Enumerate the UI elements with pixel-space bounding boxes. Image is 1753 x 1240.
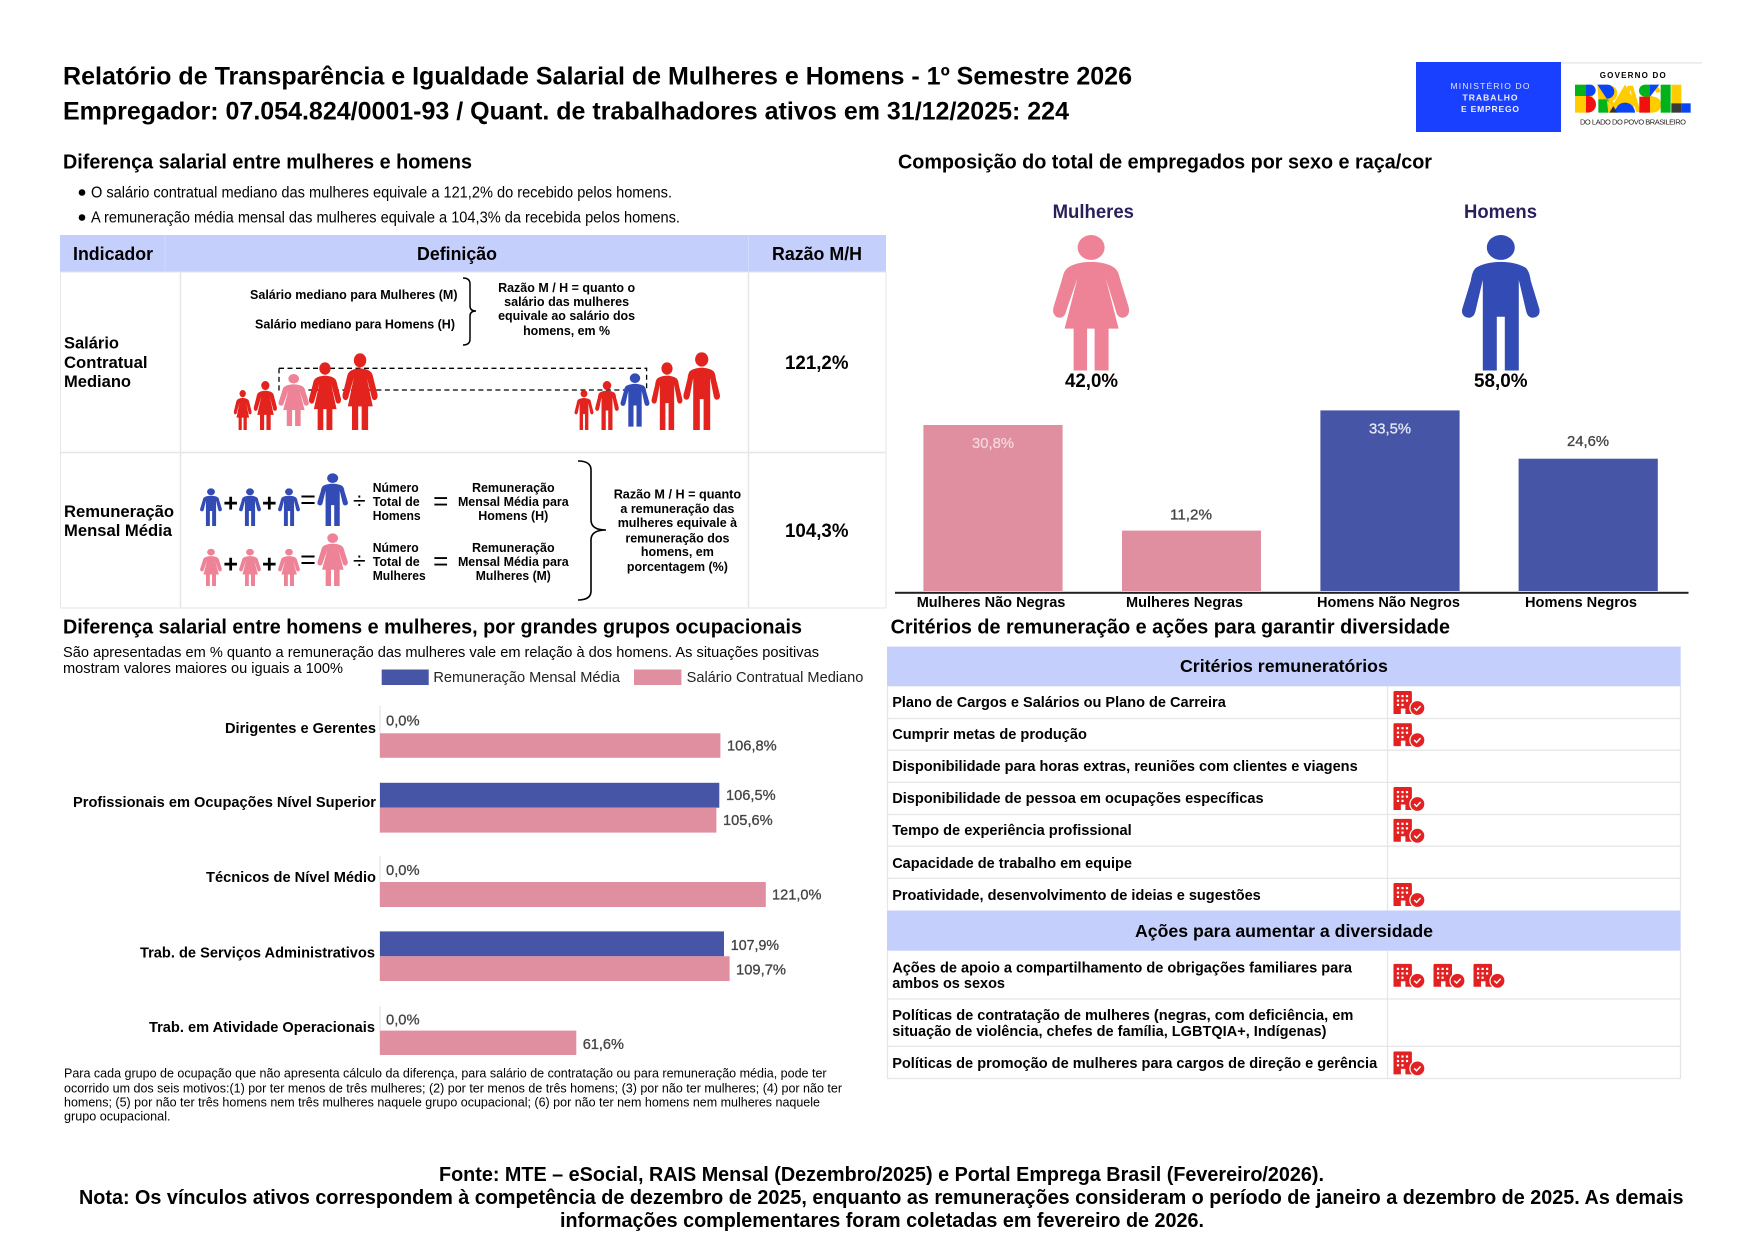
panel: criteria table: Proatividade, desenvolvimento de ideias e sugestões [892,888,1261,904]
definition: ratio explanation with brace [578,461,741,600]
panel: salary indicator table: Mensal Média [64,521,173,540]
definition: average pay formula for men: Homens (H) [478,508,548,523]
panel: salary indicator table: Salário [64,334,119,352]
group: Profissionais em Ocupações Nível Superior: 106,5% [726,787,776,804]
definition: average pay formula for men: Número [373,480,419,495]
definition: average pay formula for men: Homens [373,508,421,523]
panel: criteria table: Ações para aumentar a diversidade [1135,921,1433,941]
chart legend [382,669,863,686]
definition: median salary: homens, em % [523,323,611,338]
bar chart: composition by sex and race: Homens Negros [1525,595,1637,611]
panel: criteria table: situação de violência, chefes de família, LGBTQIA+, Indígenas) [892,1024,1327,1040]
group: Trab. em Atividade Operacionais: 61,6% [583,1036,624,1053]
definition: ratio explanation with brace: homens, em [641,544,714,559]
icons: women and men ordered by salary [234,352,720,430]
definition: average pay formula for men: + [262,490,277,518]
group: Técnicos de Nível Médio: Técnicos de Nível Médio [206,870,376,886]
definition: average pay formula for men: ÷ [353,488,366,514]
group: Técnicos de Nível Médio: 121,0% [772,886,822,904]
definition: median salary: Salário mediano para Homens (H) [255,316,455,332]
footer: source and note [79,1164,1684,1232]
bar chart: composition by sex and race: Homens Não Negros [1317,595,1460,611]
panel: criteria table: Disponibilidade para horas extras, reuniões com clientes e viagens [892,759,1358,775]
panel: criteria table: Capacidade de trabalho em equipe [892,856,1132,872]
panel: criteria table [887,647,1681,1078]
definition: ratio explanation with brace: remuneração dos [625,530,729,545]
women total figure: Mulheres [1053,202,1134,223]
panel: salary indicator table: Contratual [64,353,148,372]
panel: criteria table: Cumprir metas de produção [892,727,1087,743]
definition: median salary [250,278,635,345]
heading: grupos ocupacionais: Diferença salarial entre homens e mulheres, por grandes grupos ocupacionais [63,616,802,638]
group: Técnicos de Nível Médio [206,862,822,907]
group: Dirigentes e Gerentes: 106,8% [727,738,777,754]
logo: Ministério do Trabalho e Emprego / Governo do Brasil: GOVERNO DO [1600,71,1666,80]
group: Trab. de Serviços Administrativos [140,931,786,981]
chart legend: Salário Contratual Mediano [687,669,863,686]
logo: Ministério do Trabalho e Emprego / Governo do Brasil: MINISTÉRIO DO [1450,81,1530,91]
chart description: mostram valores maiores ou iguais a 100% [63,660,343,677]
logo: Ministério do Trabalho e Emprego / Governo do Brasil: DO LADO DO POVO BRASILEIRO [1580,118,1686,126]
panel: salary indicator table [60,235,886,608]
title: Empregador: 07.054.824/0001-93 / Quant. de trabalhadores ativos em 31/12/2025: 224 [63,98,1069,126]
panel: criteria table: ambos os sexos [892,976,1005,992]
summary bullets: A remuneração média mensal das mulheres equivale a 104,3% da recebida pelos homens. [91,210,680,226]
logo: Ministério do Trabalho e Emprego / Governo do Brasil: BRASIL [1574,79,1690,121]
panel: salary indicator table: Definição [417,244,497,264]
group: Trab. de Serviços Administrativos: Trab. de Serviços Administrativos [140,946,375,962]
bar chart: composition by sex and race: 11,2% [1170,506,1212,524]
chart description: São apresentadas em % quanto a remuneração das mulheres vale em relação à dos homens. As situações positivas [63,644,819,661]
logo: Ministério do Trabalho e Emprego / Governo do Brasil [1416,62,1702,132]
footer: source and note: informações complementares foram coletadas em fevereiro de 2026. [560,1210,1204,1232]
panel: criteria table: Plano de Cargos e Salários ou Plano de Carreira [892,695,1227,711]
definition: average pay formula for women: Total de [373,554,420,569]
bar chart: composition by sex and race: Mulheres Não Negras [917,595,1065,611]
group: Dirigentes e Gerentes: Dirigentes e Gerentes [225,721,376,737]
men total figure [1462,202,1540,392]
logo: Ministério do Trabalho e Emprego / Governo do Brasil: TRABALHO [1462,92,1518,102]
definition: average pay formula for men: = [300,484,316,514]
men total figure: Homens [1464,202,1537,223]
logo: Ministério do Trabalho e Emprego / Governo do Brasil: E EMPREGO [1461,104,1519,114]
bar chart: composition by sex and race: Mulheres Negras [1126,595,1243,611]
definition: median salary: Salário mediano para Mulheres (M) [250,287,458,302]
definition: average pay formula for women: Mensal Média para [458,554,570,569]
panel: salary indicator table: Razão M/H [772,244,862,264]
bar chart: occupational groups [73,706,822,1055]
panel: criteria table: Ações de apoio a compartilhamento de obrigações familiares para [892,960,1353,976]
panel: criteria table: Políticas de contratação de mulheres (negras, com deficiência, em [892,1008,1353,1024]
definition: ratio explanation with brace: mulheres equivale à [618,515,738,530]
women total figure [1053,202,1134,392]
bar chart: composition by sex and race: 33,5% [1369,420,1411,438]
group: Trab. em Atividade Operacionais: 0,0% [386,1012,420,1028]
definition: average pay formula for women [200,533,570,586]
men total figure: 58,0% [1474,371,1528,392]
footnote: grupo ocupacional. [64,1108,170,1123]
definition: median salary: Razão M / H = quanto o [498,280,635,295]
definition: ratio explanation with brace: a remuneração das [620,501,734,516]
footnote [64,1066,843,1123]
chart description [63,644,819,677]
definition: average pay formula for women: Remuneração [472,540,555,555]
bar chart: composition by sex and race: 30,8% [972,435,1014,452]
panel: criteria table: Tempo de experiência profissional [892,823,1132,839]
heading: critérios: Critérios de remuneração e ações para garantir diversidade [891,616,1450,638]
title: Relatório de Transparência e Igualdade Salarial de Mulheres e Homens - 1º Semestre 2026 [63,62,1132,90]
definition: ratio explanation with brace: porcentagem (%) [627,559,728,574]
group: Profissionais em Ocupações Nível Superior [73,783,776,833]
group: Técnicos de Nível Médio: 0,0% [386,862,420,879]
panel: salary indicator table: Remuneração [64,502,174,521]
summary bullets: O salário contratual mediano das mulheres equivale a 121,2% do recebido pelos homens. [91,184,672,202]
group: Dirigentes e Gerentes [225,712,777,758]
definition: average pay formula for women: + [262,550,277,578]
panel: criteria table: Critérios remuneratórios [1180,656,1388,676]
heading: composição: Composição do total de empregados por sexo e raça/cor [898,152,1432,174]
group: Trab. em Atividade Operacionais: Trab. em Atividade Operacionais [149,1020,375,1036]
definition: average pay formula for women: = [433,546,448,576]
group: Profissionais em Ocupações Nível Superior: 105,6% [723,812,773,829]
bar chart: composition by sex and race: 24,6% [1567,433,1609,450]
group: Trab. de Serviços Administrativos: 109,7% [736,962,786,978]
group: Dirigentes e Gerentes: 0,0% [386,712,420,730]
panel: criteria table: Disponibilidade de pessoa em ocupações específicas [892,791,1264,807]
definition: average pay formula for women: Mulheres [373,568,426,583]
footer: source and note: Nota: Os vínculos ativos correspondem à competência de dezembro de 2025, enquanto as remunerações consideram o período de janeiro a dezembro de 2025. As demais [79,1187,1684,1209]
definition: average pay formula for men: + [223,490,238,518]
panel: salary indicator table: Mediano [64,372,131,391]
bar chart: composition by sex and race [895,410,1688,611]
definition: average pay formula for women: ÷ [353,548,366,574]
definition: average pay formula for men: Remuneração [472,480,555,495]
definition: average pay formula for men: Total de [373,494,420,509]
definition: ratio explanation with brace: Razão M / H = quanto [614,487,741,502]
definition: median salary: salário das mulheres [504,294,629,309]
footer: source and note: Fonte: MTE – eSocial, RAIS Mensal (Dezembro/2025) e Portal Emprega Brasil (Fevereiro/2026). [439,1164,1324,1186]
definition: average pay formula for women: = [300,544,316,574]
definition: average pay formula for women: Mulheres (M) [476,568,551,583]
women total figure: 42,0% [1065,371,1118,392]
panel: salary indicator table: Indicador [73,244,153,264]
group: Trab. em Atividade Operacionais [149,1012,624,1055]
definition: average pay formula for men: Mensal Média para [458,494,570,509]
footnote: homens; (5) por não ter três homens nem três mulheres naquele grupo ocupacional; (6) por não ter nem homens nem mulheres naquele [64,1094,820,1109]
heading: diferença salarial: Diferença salarial entre mulheres e homens [63,152,472,174]
footnote: Para cada grupo de ocupação que não apresenta cálculo da diferença, para salário de contratação ou para remuneração média, pode ter [64,1066,827,1080]
panel: criteria table: Políticas de promoção de mulheres para cargos de direção e gerência [892,1056,1378,1072]
group: Trab. de Serviços Administrativos: 107,9% [731,937,779,954]
definition: average pay formula for men: = [433,486,448,516]
summary bullets [79,184,680,226]
definition: average pay formula for women: + [223,550,238,578]
footnote: ocorrido um dos seis motivos:(1) por ter menos de três mulheres; (2) por ter menos de três homens; (3) por não ter mulheres; (4) por não ter [64,1080,843,1095]
definition: median salary: equivale ao salário dos [498,308,635,323]
definition: average pay formula for women: Número [373,540,419,555]
panel: salary indicator table: 104,3% [785,520,848,542]
title [63,62,1132,126]
chart legend: Remuneração Mensal Média [433,669,621,686]
panel: salary indicator table: 121,2% [785,352,848,374]
definition: average pay formula for men [200,473,570,526]
group: Profissionais em Ocupações Nível Superior: Profissionais em Ocupações Nível Superior [73,795,376,811]
